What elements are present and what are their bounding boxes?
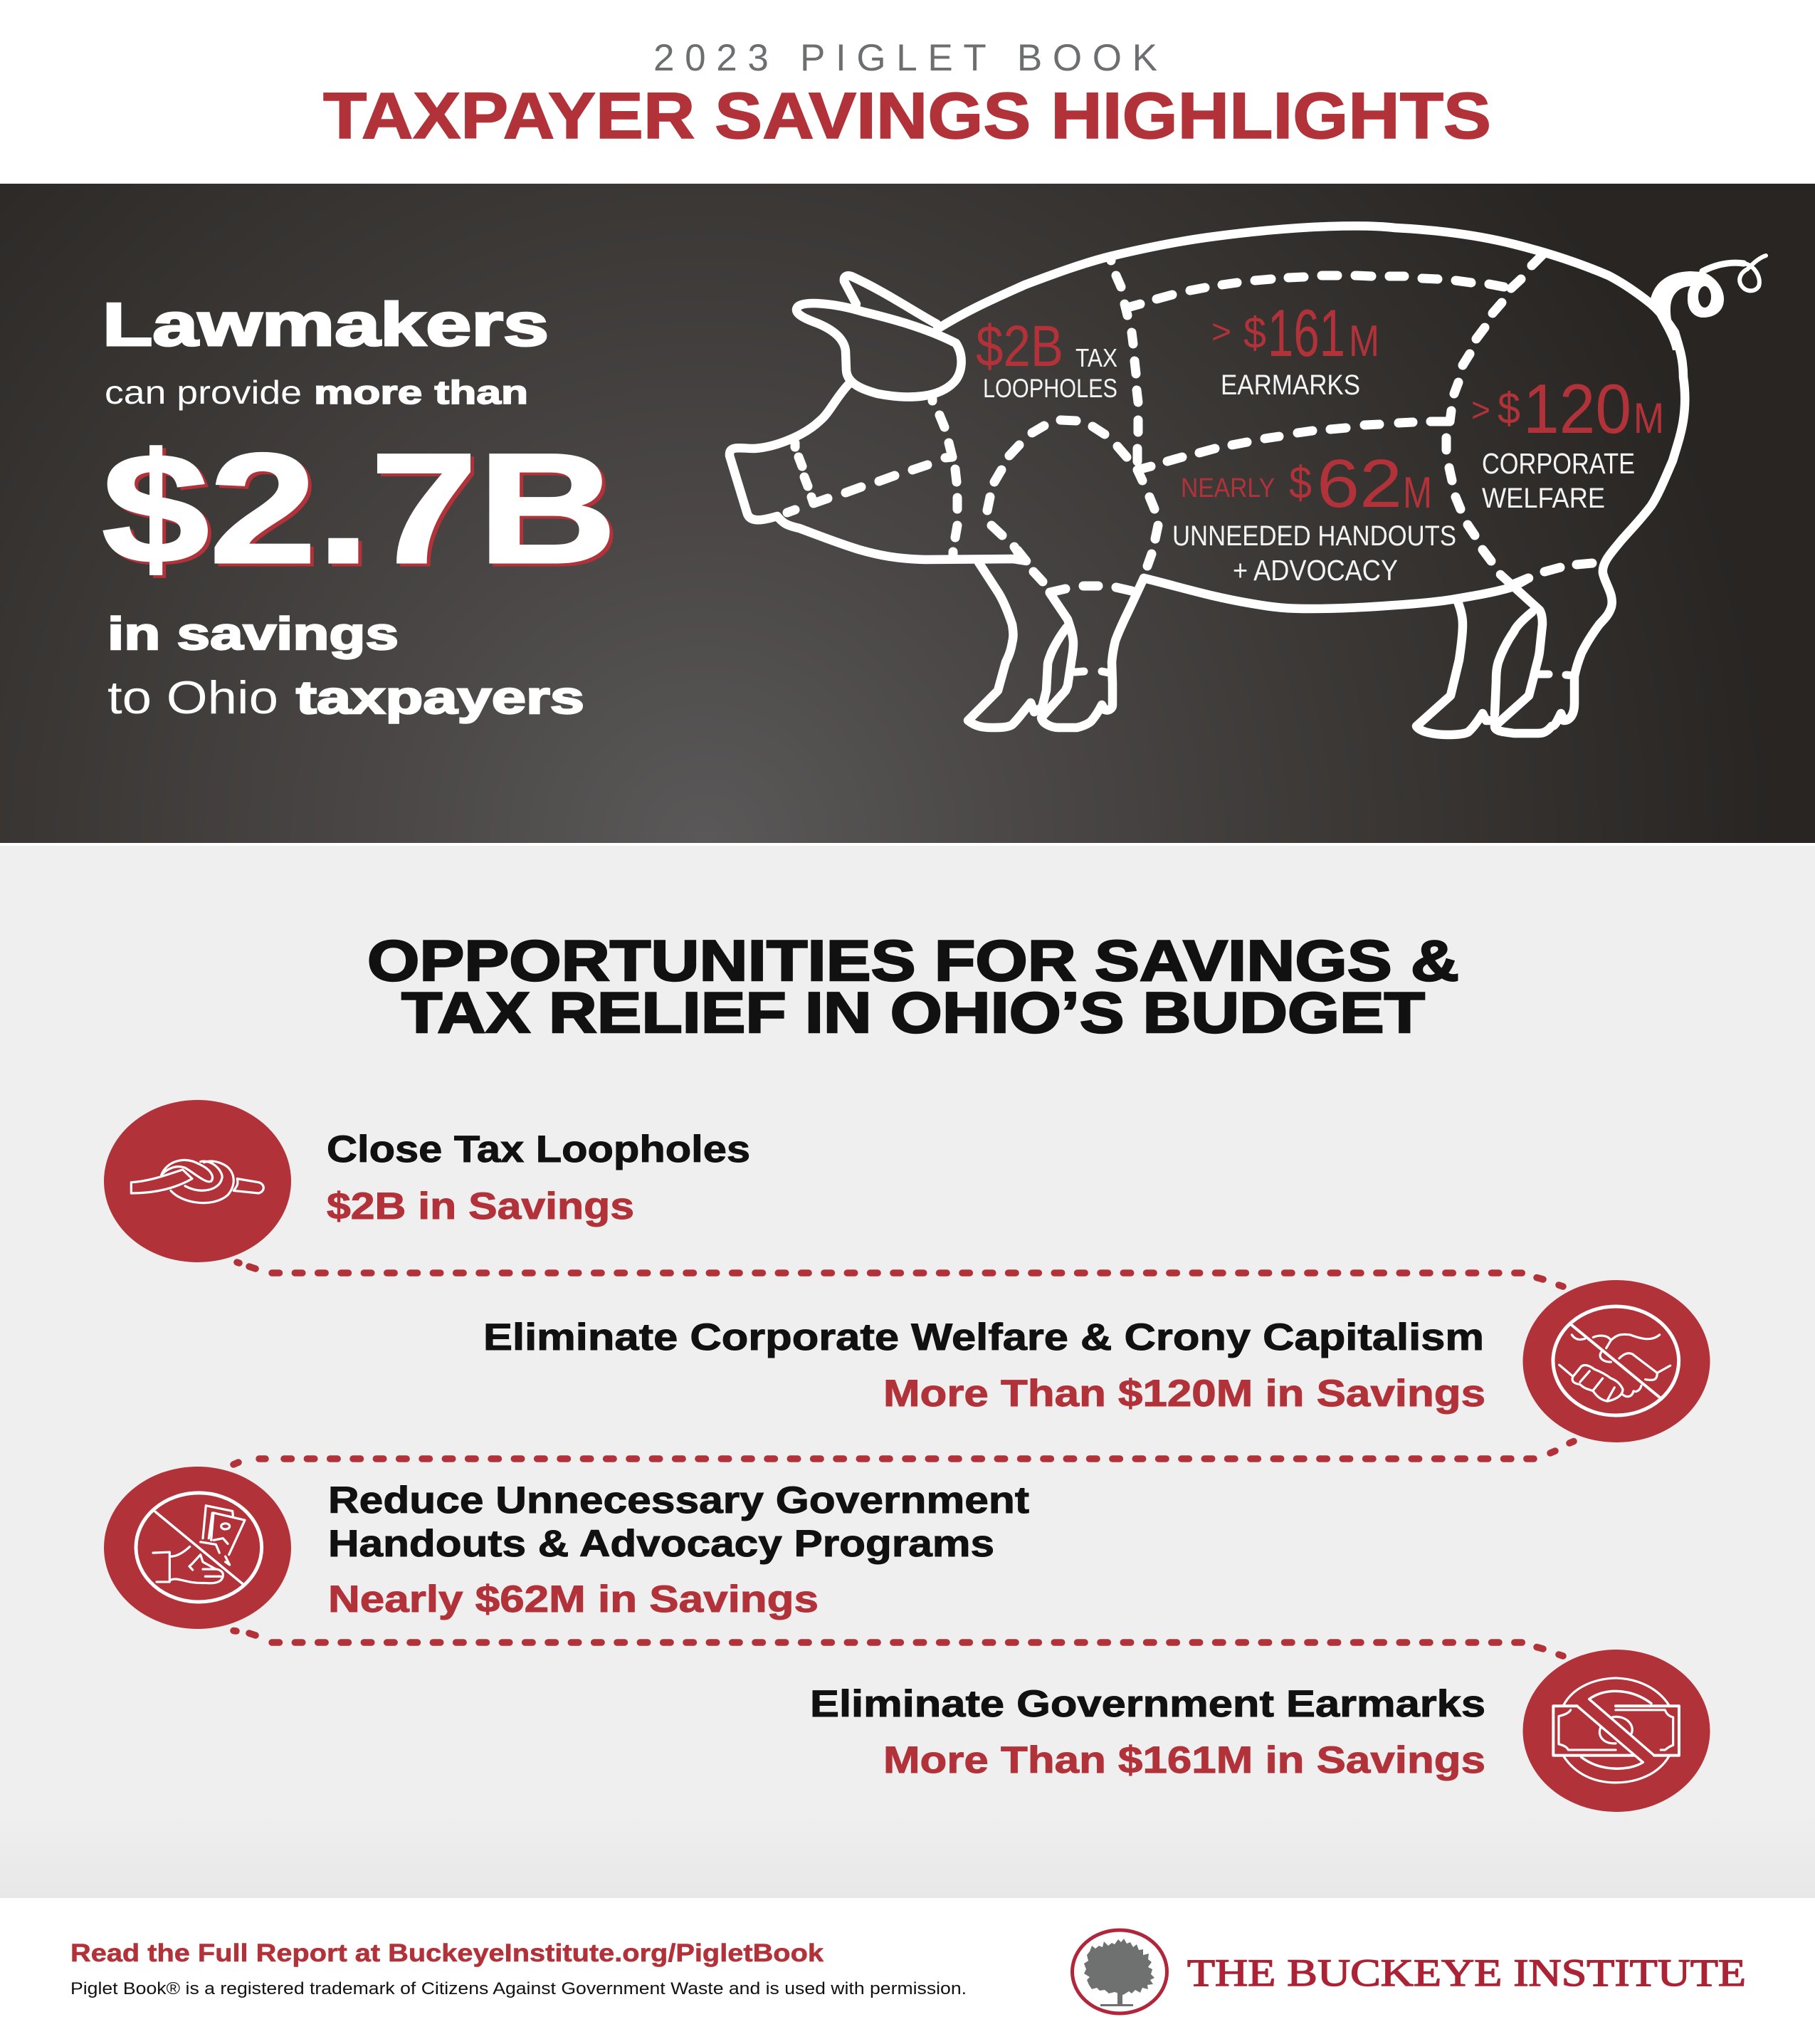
dollar: $	[1243, 309, 1266, 358]
chalk label: earmarks	[1211, 295, 1379, 401]
label line 1: Reduce Unnecessary Government	[328, 1479, 1029, 1521]
circle	[104, 1100, 291, 1262]
greater-than sign: >	[1471, 392, 1490, 429]
connector 2 straight run	[284, 1455, 1534, 1462]
heading line 2: TAX RELIEF IN OHIO’S BUDGET	[401, 981, 1425, 1045]
dashed loin line	[1167, 303, 1502, 461]
logo tree	[1084, 1939, 1154, 2006]
connector 3 straight run	[272, 1639, 1528, 1646]
dashed neck and snout cuts	[787, 399, 957, 559]
connector 3 curved ends	[233, 1630, 1563, 1656]
item 3: handouts and advocacy	[104, 1467, 1029, 1629]
+ ADVOCACY: + ADVOCACY	[1233, 554, 1398, 587]
NEARLY: NEARLY	[1181, 473, 1275, 503]
text: taxpayers: taxpayers	[296, 671, 584, 723]
WELFARE: WELFARE	[1482, 483, 1605, 514]
savings: More Than $161M in Savings	[883, 1739, 1485, 1781]
belly	[1144, 578, 1529, 609]
CORPORATE: CORPORATE	[1482, 447, 1635, 480]
back and rump	[937, 226, 1685, 733]
savings: Nearly $62M in Savings	[328, 1578, 819, 1620]
pig diagram	[730, 226, 1766, 735]
item 2: corporate welfare	[483, 1280, 1710, 1442]
logo ring	[1072, 1930, 1167, 2013]
main title: TAXPAYER SAVINGS HIGHLIGHTS	[323, 80, 1491, 152]
hoof ticks	[1075, 671, 1574, 676]
panel: lower savings background	[0, 846, 1815, 1898]
label line 2: Handouts & Advocacy Programs	[328, 1523, 994, 1565]
tail curl	[1703, 263, 1744, 271]
greater-than sign: >	[1211, 313, 1231, 351]
text: more than: more than	[314, 374, 528, 411]
title block	[323, 37, 1491, 152]
dashed earmarks top	[1125, 255, 1542, 315]
ear rear	[844, 276, 937, 324]
M: M	[1634, 394, 1664, 442]
item 1: close tax loopholes	[104, 1100, 750, 1262]
savings: More Than $120M in Savings	[883, 1373, 1485, 1415]
icon: no money hand	[104, 1467, 291, 1629]
headline stat block	[102, 291, 621, 723]
section heading	[367, 929, 1459, 1045]
handshake lines	[1553, 1306, 1679, 1415]
dotted connector 3	[233, 1630, 1563, 1656]
bill lines	[1553, 1678, 1679, 1783]
stat shadow: $2.7B	[105, 424, 621, 599]
dotted connector 1	[237, 1262, 1563, 1286]
dollar: $	[1498, 384, 1520, 434]
text: to Ohio: to Ohio	[107, 671, 278, 723]
UNNEEDED HANDOUTS: UNNEEDED HANDOUTS	[1172, 520, 1456, 552]
icon: knot	[104, 1100, 291, 1262]
hand and cash lines	[136, 1493, 262, 1602]
dashed ham line	[1446, 438, 1592, 585]
62: 62	[1317, 446, 1402, 522]
front far leg	[1041, 578, 1144, 728]
label: Close Tax Loopholes	[327, 1128, 750, 1170]
trademark note: Piglet Book® is a registered trademark of Citizens Against Government Waste and is used with permission.	[70, 1979, 967, 1998]
knot lines	[131, 1160, 263, 1203]
icon: no handshake	[1523, 1280, 1710, 1442]
snout and jaw	[730, 384, 1026, 561]
$2B amount: $2B	[976, 314, 1063, 379]
120: 120	[1523, 370, 1631, 448]
label: Eliminate Government Earmarks	[810, 1683, 1485, 1725]
item 4: earmarks	[810, 1650, 1710, 1812]
dotted connector 2	[233, 1441, 1574, 1464]
connector 2 curved ends	[233, 1441, 1574, 1464]
stat: $2.7B: $2.7B	[102, 421, 617, 596]
front inner leg edge	[1043, 628, 1066, 705]
logo: Buckeye Institute	[1072, 1930, 1746, 2013]
heading line 1: OPPORTUNITIES FOR SAVINGS &	[367, 929, 1459, 993]
footer	[70, 1930, 1746, 2013]
dashed shoulder line	[1110, 258, 1158, 566]
logo wordmark: THE BUCKEYE INSTITUTE	[1187, 1951, 1746, 1994]
icon: no dollar bill	[1523, 1650, 1710, 1812]
circle	[104, 1467, 291, 1629]
TAX: TAX	[1075, 343, 1117, 372]
chalk label: handouts and advocacy	[1172, 446, 1456, 587]
savings: $2B in Savings	[327, 1185, 634, 1227]
chalk label: corporate welfare	[1471, 370, 1664, 514]
kicker: 2023 Piglet Book: 2023 PIGLET BOOK	[653, 37, 1157, 79]
text: can provide: can provide	[105, 374, 302, 411]
M: M	[1349, 317, 1379, 366]
dashed front leg arch	[987, 420, 1132, 592]
tail base and loop	[1650, 271, 1724, 350]
LOOPHOLES: LOOPHOLES	[983, 374, 1117, 403]
M: M	[1403, 468, 1432, 518]
dollar: $	[1289, 457, 1312, 508]
label: Eliminate Corporate Welfare & Crony Capitalism	[483, 1316, 1484, 1358]
rear near leg	[1416, 602, 1495, 735]
connector 1 curved ends	[237, 1262, 1563, 1286]
tail tip	[1740, 256, 1766, 290]
circle	[1523, 1280, 1710, 1442]
text: Lawmakers: Lawmakers	[102, 291, 549, 359]
rear inner leg edge	[1495, 612, 1532, 714]
chalk label: $2B tax loopholes	[976, 314, 1117, 403]
report link text: Read the Full Report at BuckeyeInstitute.org/PigletBook	[70, 1939, 824, 1967]
pig outline	[730, 226, 1766, 735]
connector 1 straight run	[272, 1269, 1528, 1277]
text: in savings: in savings	[107, 608, 399, 659]
front near leg	[968, 562, 1043, 728]
161: 161	[1268, 295, 1345, 370]
panel: chalkboard band	[0, 184, 1815, 843]
EARMARKS: EARMARKS	[1221, 370, 1360, 401]
circle	[1523, 1650, 1710, 1812]
ear front	[796, 303, 962, 397]
